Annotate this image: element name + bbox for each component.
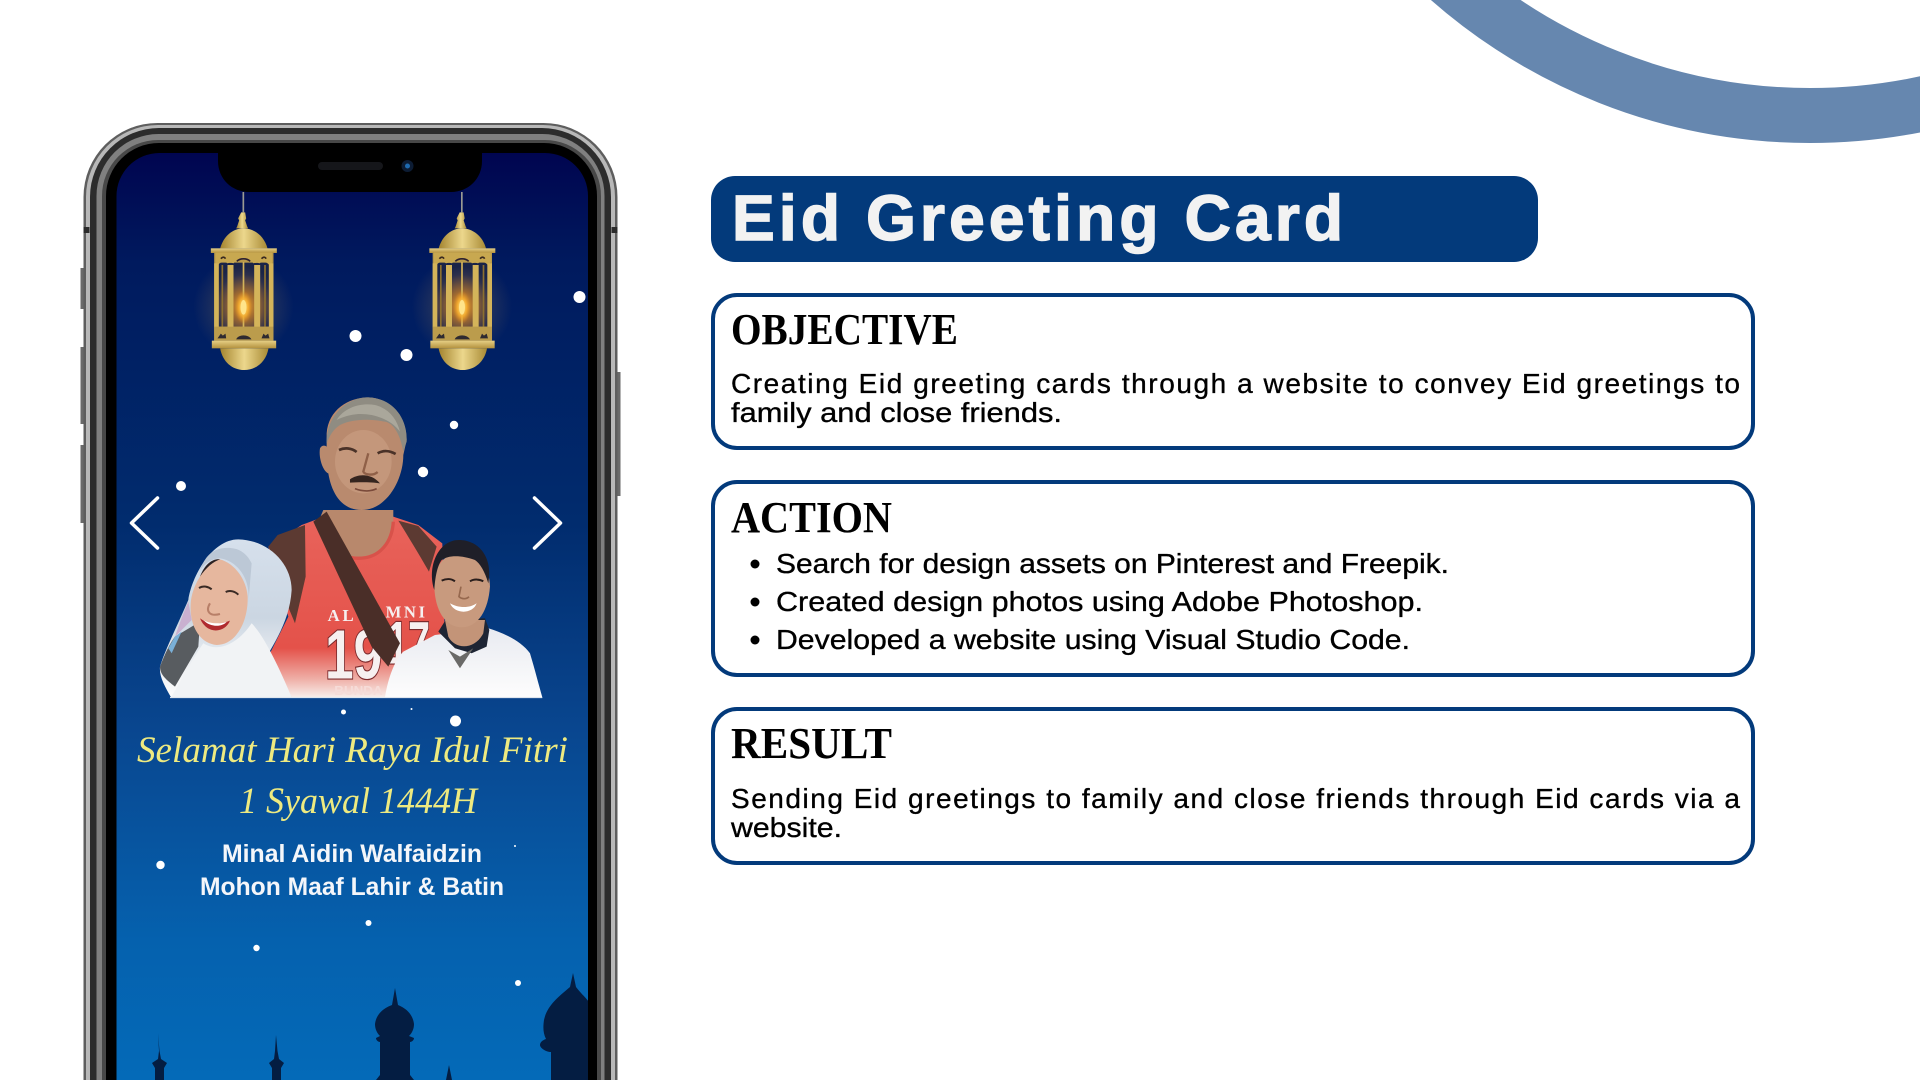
falling snow dots — [156, 291, 586, 986]
lantern left — [200, 192, 288, 370]
objective text — [731, 368, 1740, 428]
family photo — [160, 397, 542, 698]
phone frame — [84, 123, 618, 1080]
objective heading: OBJECTIVE — [731, 305, 958, 354]
action heading: ACTION — [731, 493, 892, 542]
shirt print: BUNDA — [334, 684, 383, 698]
phone screen — [116, 153, 592, 1080]
carousel arrow right — [534, 498, 560, 548]
greeting line 3: Minal Aidin Walfaidzin — [222, 840, 482, 868]
greeting script line 2: 1 Syawal 1444H — [239, 781, 479, 822]
title text: Eid Greeting Card — [732, 182, 1343, 254]
objective text: family and close friends. — [731, 397, 1062, 428]
shirt print: 19 — [325, 615, 382, 693]
action list: Search for design assets on Pinterest and Freepik. — [776, 548, 1449, 579]
objective text: Creating Eid greeting cards through a website to convey Eid greetings to — [731, 368, 1740, 399]
shirt print: AL — [328, 606, 354, 625]
panel: objective — [713, 295, 1753, 448]
result text — [730, 783, 1740, 843]
lantern right — [418, 192, 506, 370]
mosque silhouette — [152, 973, 592, 1080]
result heading: RESULT — [731, 719, 892, 768]
man in red shirt — [268, 397, 445, 698]
shirt print: MNI — [386, 602, 425, 621]
greeting line 4: Mohon Maaf Lahir & Batin — [200, 873, 504, 901]
young man in white shirt — [385, 540, 542, 697]
result text: Sending Eid greetings to family and close friends through Eid cards via a — [731, 783, 1740, 814]
phone notch — [218, 153, 482, 192]
woman in hijab — [160, 539, 292, 697]
phone mockup — [80, 123, 620, 1080]
panel: action — [713, 482, 1753, 675]
phone side buttons — [80, 268, 620, 523]
shirt print: 17 — [387, 609, 430, 676]
action list: Created design photos using Adobe Photoshop. — [776, 586, 1423, 617]
decorative arc top right — [1264, 0, 1920, 116]
action list: Developed a website using Visual Studio Code. — [776, 624, 1410, 655]
title banner — [711, 176, 1538, 262]
shirt print — [327, 606, 429, 695]
greeting script line 1: Selamat Hari Raya Idul Fitri — [137, 730, 568, 771]
panel: result — [713, 709, 1753, 863]
result text: website. — [730, 812, 842, 843]
action list — [750, 548, 1449, 655]
carousel arrow left — [132, 498, 158, 548]
